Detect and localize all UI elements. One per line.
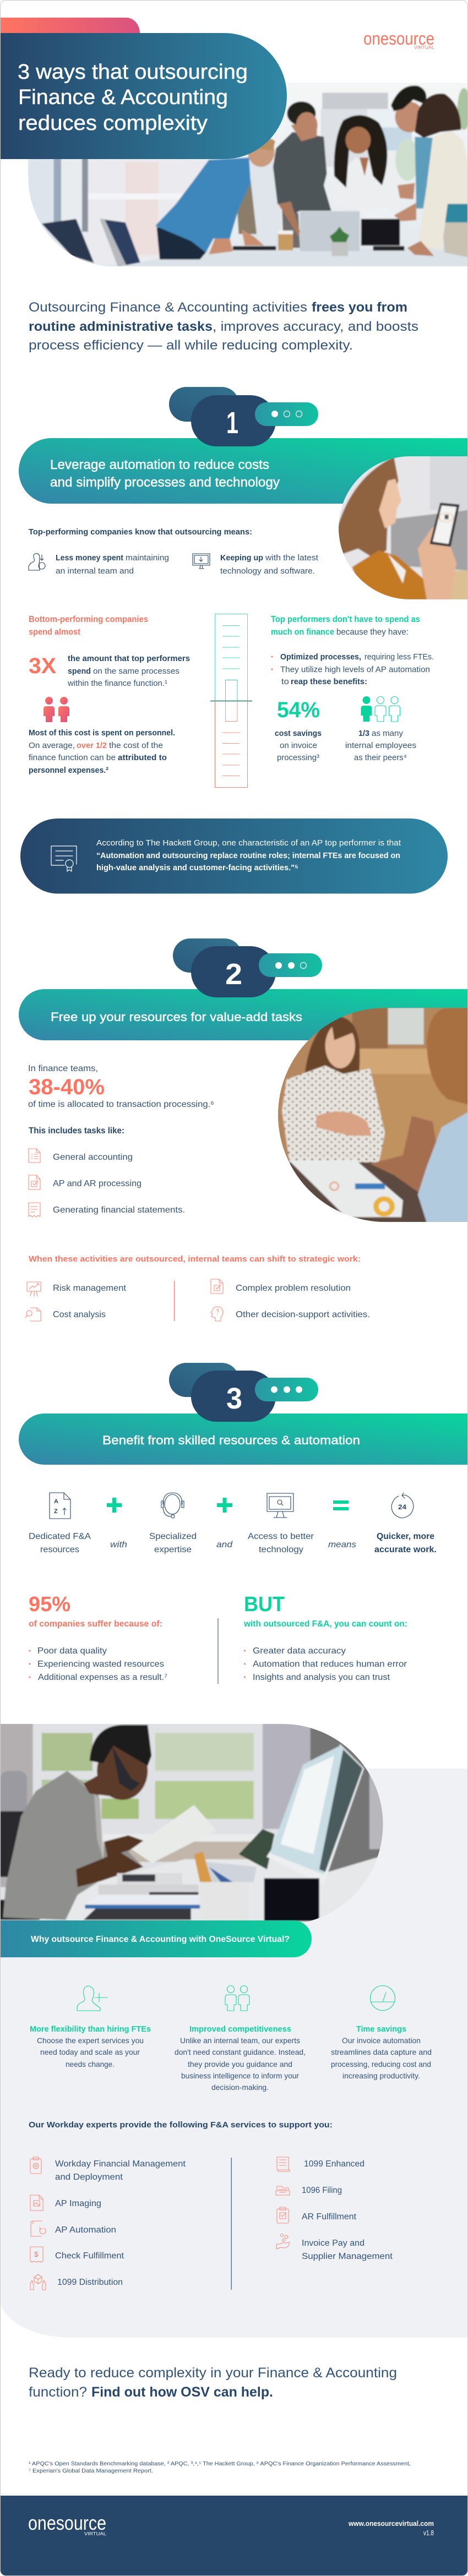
benefit: keeping up: technology and software. [220,566,315,576]
why outsource band: Why outsource Finance & Accounting with OneSource Virtual? [31,1935,290,1944]
icon: receipt [29,1203,40,1217]
services left column: Check Fulfillment [55,2251,124,2261]
column: more flexibility: More flexibility than hiring FTEs [30,2024,151,2034]
panel: but with outsourced F&A: Greater data accuracy [253,1646,346,1656]
equation: dedicated resources + expertise + technology = quicker work: Quicker, more [377,1532,434,1541]
column: time savings: streamlines data capture and [331,2048,432,2056]
grey background panel [0,1769,468,2338]
column: time savings [331,1986,432,2080]
item: decision support: Other decision-support activities. [236,1310,370,1319]
callout: Hackett Group quote: high-value analysis and customer-facing activities."⁵ [96,863,298,872]
intro paragraph: routine administrative tasks [29,319,213,334]
column: more flexibility: Choose the expert services you [37,2036,144,2045]
equation: dedicated resources + expertise + technology = quicker work: accurate work. [374,1545,437,1554]
left column: bottom performers: attributed to [118,753,167,762]
right column: top performers: on invoice [280,741,317,750]
equation: dedicated resources + expertise + technology = quicker work: resources [40,1545,79,1554]
call to action: Ready to reduce complexity in your Finance & Accounting [29,2365,397,2381]
why outsource band [0,1920,312,1957]
icon: A-Z document: Z [54,1508,58,1515]
section 2 number badge [173,938,322,997]
icon: 24 hour clock: 24 [398,1503,406,1511]
left column: bottom performers: On average, [29,741,75,750]
benefit: less money spent: maintaining [126,553,169,563]
center thermometer graphic [210,614,252,787]
tasks heading: This includes tasks like: [29,1126,124,1136]
panel: but with outsourced F&A [243,1593,407,1682]
left column: bottom performers: Most of this cost is spent on personnel. [29,728,175,738]
services right column [276,2157,393,2261]
intro paragraph: process efficiency — all while reducing complexity. [29,338,353,353]
equation: dedicated resources + expertise + technology = quicker work: Specialized [149,1532,197,1541]
intro paragraph [29,300,418,353]
panel: but with outsourced F&A: Automation that reduces human error [253,1660,407,1669]
icon: headset [161,1493,184,1518]
hero title: 3 ways that outsourcing [18,61,248,84]
services right column: Invoice Pay and [302,2239,364,2248]
icon: hands holding box [30,2274,46,2290]
icon: person plus [77,1986,107,2011]
services left column: and Deployment [55,2173,123,2182]
icon: clipboard check [277,2207,289,2223]
icon: person with dollar [29,554,45,570]
icon: 24 hour clock [391,1493,413,1518]
left column: bottom performers: the cost of the [109,741,163,750]
services right column: Supplier Management [302,2252,393,2261]
intro paragraph: frees you from [312,300,407,315]
right column: top performers: Top performers don't have to spend as [271,615,420,624]
services left column: AP Automation [55,2225,116,2235]
icon: presentation chart [27,1282,41,1296]
stat: 38-40% of time: 38-40% [29,1075,105,1099]
column: time savings: increasing productivity. [342,2071,420,2080]
benefit: less money spent [56,553,169,576]
benefit: keeping up: Keeping up [220,553,263,563]
panel: 95% of companies suffer: 95% [29,1593,70,1616]
left column: bottom performers: personnel expenses.² [29,766,108,775]
plus sign [217,1498,232,1513]
divider [231,2158,232,2290]
right column: top performers: as many [372,729,403,738]
column: improved competitiveness: they provide you guidance and [188,2060,292,2069]
column: time savings: Time savings [356,2024,406,2034]
footnotes: ⁷ Experian's Global Data Management Report. [29,2468,153,2474]
call to action [29,2365,397,2400]
divider [218,1618,219,1684]
plus sign [107,1498,122,1513]
services right column: 1099 Enhanced [304,2159,364,2169]
equation: dedicated resources + expertise + technology = quicker work: Access to better [248,1532,314,1541]
column: improved competitiveness: Unlike an internal team, our experts [180,2036,300,2045]
stat: 54%: 54% [277,698,320,722]
hero title: Finance & Accounting [18,86,228,109]
strategic work heading: When these activities are outsourced, internal teams can shift to strategic work: [29,1254,361,1264]
panel: 95% of companies suffer [29,1593,167,1682]
section 1 heading: and simplify processes and technology [50,475,280,490]
left column: bottom performers: on the same processes [93,667,179,676]
services left column: Workday Financial Management [55,2159,186,2169]
callout: Hackett Group quote: “Automation and outsourcing replace routine roles; internal FTEs are focused on [96,851,400,860]
photo: woman reviewing invoice at desk [0,1723,388,1928]
section 1 number badge [169,387,318,446]
header coral tab [0,18,140,33]
left column: bottom performers: spend [68,667,91,676]
section 2 green heading band [19,989,468,1040]
logo: onesource virtual: VIRTUAL [414,45,435,50]
column: improved competitiveness: decision-making. [211,2083,269,2092]
task: financial statements: Generating financial statements. [53,1205,185,1215]
right column: top performers: reap these benefits: [291,677,367,686]
left column: bottom performers: within the finance function.¹ [67,679,167,688]
left column: bottom performers: the amount that top performers [68,654,190,663]
column: more flexibility: needs change. [66,2060,115,2069]
icon: image document [30,2195,43,2211]
stat: 38-40% of time: of time is allocated to transaction processing.⁶ [28,1100,214,1109]
call to action: function? [29,2384,87,2400]
divider [174,1281,175,1321]
footer website and version: v1.8 [423,2529,434,2537]
panel: 95% of companies suffer: Additional expenses as a result.⁷ [38,1673,167,1682]
logo: onesource virtual: onesource [363,29,434,48]
section 1 number badge: 1 [226,405,238,440]
equation: dedicated resources + expertise + technology = quicker work: and [216,1540,233,1549]
section 2 green heading band: Free up your resources for value-add tasks [51,1010,302,1024]
section 2 number badge: 2 [225,958,242,991]
footer website and version: www.onesourcevirtual.com [348,2520,434,2528]
icon: monitor with magnifier [267,1493,293,1518]
hero photo: team around a laptop [0,81,468,269]
photo: two colleagues meeting [275,1007,468,1226]
equation: dedicated resources + expertise + technology = quicker work: expertise [154,1545,192,1554]
column: improved competitiveness: Improved competitiveness [189,2024,291,2034]
icon: three people, one filled [361,696,400,722]
benefit: less money spent: Less money spent [56,553,123,563]
icon: filing tray [276,2186,290,2195]
item: complex problem resolution: Complex problem resolution [236,1284,351,1293]
icon: monitor with download [193,554,210,569]
task: AP and AR processing: AP and AR processing [53,1179,142,1188]
stat: 3X: 3X [29,654,56,678]
left column: bottom performers: Bottom-performing companies [29,615,148,624]
icon: gauge [370,1986,395,2010]
icon: two people [225,1986,249,2011]
column: more flexibility [30,1986,151,2069]
icon: head with question mark [211,1307,223,1321]
left column: bottom performers [29,615,190,775]
icon: document check [29,1175,40,1189]
photo: woman using phone [337,455,468,602]
icon: certificate [51,846,77,871]
equation: dedicated resources + expertise + technology = quicker work: means [328,1540,356,1549]
icon: document list [29,1149,40,1163]
call to action: Find out how OSV can help. [91,2384,273,2400]
stat: 38-40% of time [28,1064,214,1109]
services heading: Our Workday experts provide the following F&A services to support you: [29,2120,333,2130]
footnotes: ¹ APQC's Open Standards Benchmarking database, ² APQC, ³,⁴,⁵ The Hackett Group, ⁶ APQC's Finance Organization Performance Assessment, [29,2460,411,2467]
equation: dedicated resources + expertise + technology = quicker work [29,1493,437,1554]
right column: top performers: They utilize high levels of AP automation [280,665,430,674]
equation: dedicated resources + expertise + technology = quicker work: Dedicated F&A [29,1532,91,1541]
column: improved competitiveness: don't need constant guidance. Instead, [175,2048,306,2056]
section 3 number badge [169,1363,318,1422]
services left column [30,2157,186,2290]
callout: Hackett Group quote [20,818,448,894]
benefit: less money spent: an internal team and [56,566,134,576]
section 1 heading [50,457,280,490]
right column: top performers: to [281,677,289,686]
column: improved competitiveness: business intelligence to inform your [181,2071,299,2080]
column: more flexibility: need today and scale as your [40,2048,140,2056]
panel: but with outsourced F&A: Insights and analysis you can trust [253,1673,390,1682]
services right column: AR Fulfillment [302,2212,357,2222]
section 3 number badge: 3 [226,1382,242,1415]
left column: bottom performers: finance function can be [29,753,116,762]
item: cost analysis: Cost analysis [53,1310,106,1319]
item: risk management: Risk management [53,1284,127,1293]
panel: 95% of companies suffer: Poor data quality [37,1646,107,1656]
section 1 green heading band [19,438,468,504]
section 1 heading: Leverage automation to reduce costs [50,457,269,472]
intro paragraph: Outsourcing Finance & Accounting activities [29,300,307,315]
footer logo: VIRTUAL [84,2531,106,2536]
dollar mark: $ [34,2250,39,2258]
right column: top performers: processing³ [277,753,319,762]
column: time savings: processing, reducing cost and [331,2060,431,2069]
column: time savings: Our invoice automation [342,2036,421,2045]
icon: folder refresh [31,2221,46,2236]
hero title panel [0,33,287,159]
right column: top performers: as their peers⁴ [354,753,407,762]
callout: Hackett Group quote: According to The Hackett Group, one characteristic of an AP top performer is that [96,838,401,848]
right column: top performers: internal employees [345,741,416,750]
hero title: reduces complexity [18,112,208,135]
footer [0,2496,468,2576]
icon: two people [43,697,69,722]
section 3 green heading band [19,1413,468,1465]
services left column: 1099 Distribution [57,2278,123,2287]
right column: top performers: Optimized processes, [280,652,361,662]
column: improved competitiveness [175,1986,306,2092]
intro paragraph: , improves accuracy, and boosts [213,319,418,334]
icon: hand with coins [276,2234,290,2249]
section 3 green heading band: Benefit from skilled resources & automation [102,1433,360,1447]
right column: top performers: 1/3 [358,729,369,738]
left column: bottom performers: over 1/2 [77,741,107,750]
footer website and version [348,2520,434,2537]
task: general accounting: General accounting [53,1153,133,1162]
left column: bottom performers: spend almost [29,627,81,637]
intro: top performers know: Top-performing companies know that outsourcing means: [29,527,252,537]
icon: dollar receipt [30,2247,43,2262]
equation: dedicated resources + expertise + technology = quicker work: with [110,1540,127,1549]
right column: top performers: requiring less FTEs. [364,652,434,662]
services left column: AP Imaging [55,2199,101,2208]
icon: document check [211,1279,223,1294]
equation: dedicated resources + expertise + technology = quicker work: technology [259,1545,303,1554]
icon: A-Z document: A [54,1498,58,1505]
right column: top performers [271,615,434,762]
right column: top performers: much on finance [271,627,334,637]
icon: clipboard gear [30,2157,41,2174]
footnotes [29,2460,411,2474]
footer logo: onesource [28,2512,106,2534]
icon: A-Z document [50,1493,70,1519]
stat: 38-40% of time: In finance teams, [28,1064,98,1073]
panel: but with outsourced F&A: BUT [244,1593,285,1616]
panel: but with outsourced F&A: with outsourced F&A, you can count on: [243,1619,407,1629]
right column: top performers: cost savings [275,729,322,738]
benefit: keeping up: with the latest [265,553,319,563]
hero title [18,61,248,135]
services right column: 1096 Filing [302,2186,342,2195]
icon: document stack [277,2157,290,2171]
equals sign [333,1500,349,1510]
icon: document magnifier [25,1308,41,1321]
panel: 95% of companies suffer: of companies suffer because of: [29,1619,162,1629]
benefit: keeping up [220,553,319,576]
right column: top performers: because they have: [336,627,409,637]
panel: 95% of companies suffer: Experiencing wasted resources [37,1660,164,1669]
